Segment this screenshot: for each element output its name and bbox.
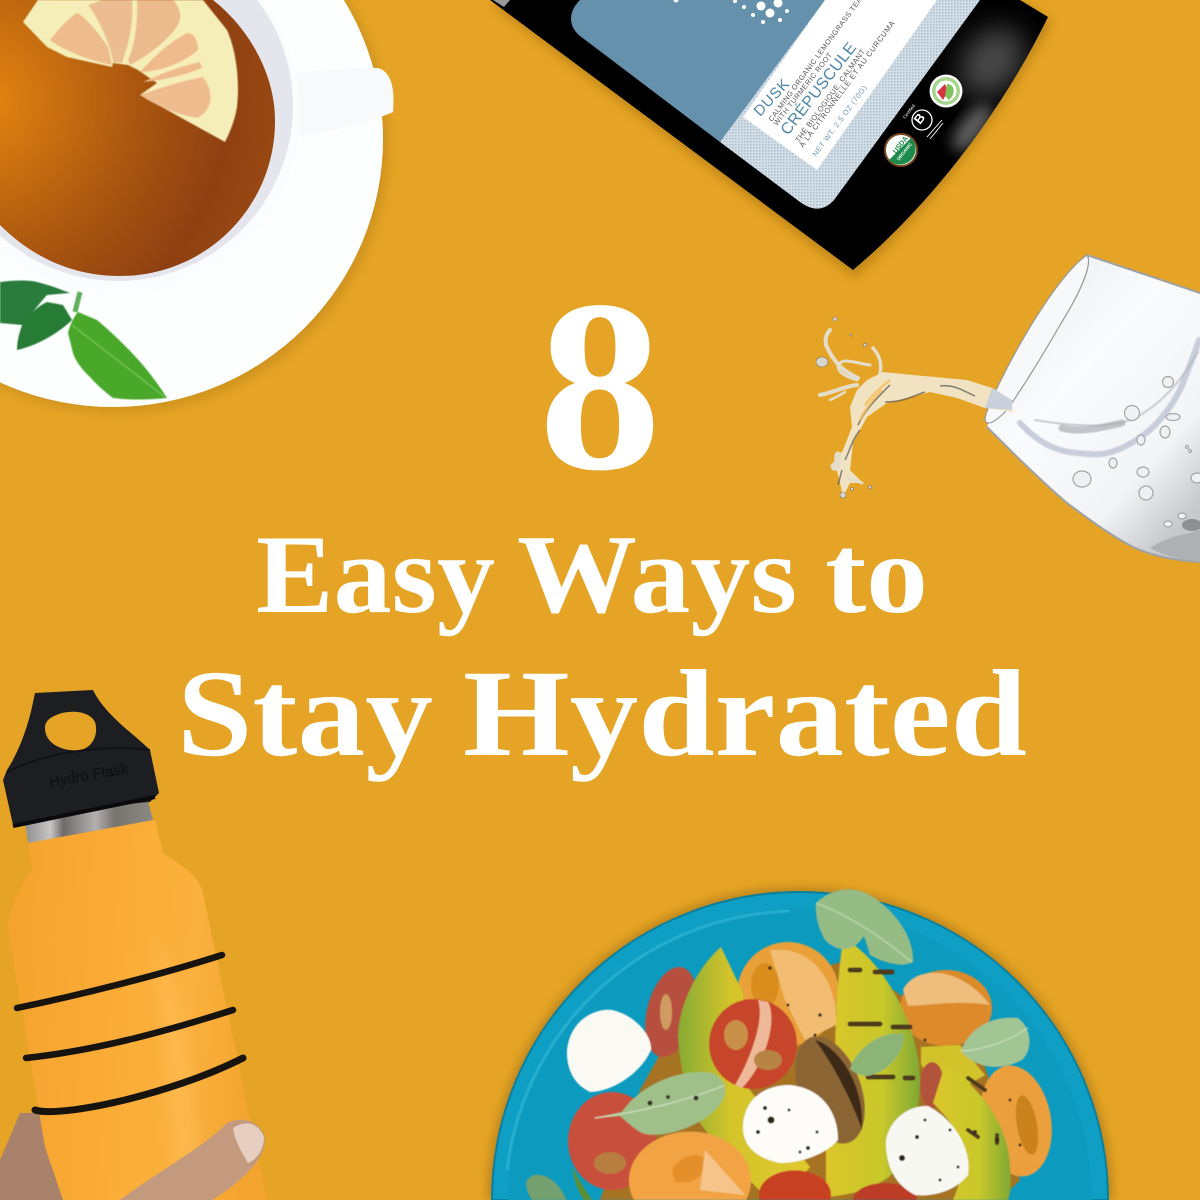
mint leaves [0, 280, 167, 400]
plate shadow [488, 888, 1112, 1200]
glass rim [985, 255, 1089, 423]
pouch dots [674, 0, 789, 24]
basil leaf right [961, 1018, 1029, 1067]
tea cup on saucer [0, 0, 394, 413]
title line two: Stay [177, 645, 433, 782]
USDA organic badge [885, 134, 917, 166]
Certified B badge: B [911, 110, 928, 127]
pouch white panel [743, 0, 937, 170]
glass base shadow [1150, 530, 1200, 562]
pouch body [490, 0, 1048, 270]
glass droplets [1073, 376, 1200, 527]
avocado behind right [921, 1045, 985, 1095]
plate [492, 892, 1108, 1200]
Certified B badge [902, 103, 943, 139]
cup handle [296, 68, 394, 136]
pouch label text: WITH TURMERIC ROOT [771, 50, 834, 127]
water swirl [1020, 340, 1199, 454]
water droplet dark [1182, 519, 1200, 531]
pouch shadow [490, 0, 1052, 278]
bottle cap: Hydro Flask [48, 760, 130, 791]
thumb [120, 1120, 265, 1200]
dark tomato [782, 1027, 878, 1153]
food gap base [600, 960, 1020, 1200]
basil leaf top [816, 889, 913, 965]
title line one: Easy [256, 513, 495, 637]
title line one: Ways [517, 513, 797, 637]
water stream bright streaks [860, 380, 890, 420]
basil leaf bottom left [526, 1175, 567, 1200]
water bottle in hand [0, 690, 267, 1200]
pouch label text: NET WT. 2.5 OZ (70G) [810, 84, 869, 158]
saucer [0, 0, 383, 407]
tomato red bottom left [568, 1092, 656, 1190]
pouch label text: CRÉPUSCULE [776, 39, 860, 138]
tomato red bottom right [853, 1183, 917, 1200]
pouch blue label [571, 0, 825, 142]
glass body [987, 255, 1200, 562]
title line two: Hydrated [463, 645, 1027, 782]
splash specks [816, 317, 872, 498]
pouch label text: À LA CITRONNELLE ET AU CURCUMA [797, 18, 897, 149]
basil leaf front [595, 1072, 725, 1135]
USDA organic badge: USDA [892, 135, 910, 155]
avocado right slice [933, 1065, 1011, 1200]
avocado green strip [572, 1167, 592, 1200]
tomato red left [637, 962, 705, 1062]
salad food [526, 889, 1060, 1200]
tomato red behind right [920, 1062, 944, 1108]
number eight: 8 [539, 250, 661, 521]
USDA organic badge: ORGANIC [896, 141, 913, 162]
salad plate [488, 888, 1112, 1200]
plate rim highlight [507, 911, 790, 1170]
stream water inside glass [985, 388, 1012, 410]
glass outline [987, 255, 1200, 562]
basil leaf centre [850, 1033, 904, 1076]
lemon slice [23, 0, 238, 142]
cup [0, 0, 300, 294]
pouch label text [750, 0, 897, 158]
tomato yellow top [737, 942, 839, 1046]
tomato orange bottom [629, 1132, 751, 1200]
pouch label text: THÉ BIOLOGIQUE, CALMANT [793, 47, 867, 144]
pouch top edge pattern [493, 0, 510, 7]
tea liquid [0, 0, 275, 276]
water splash [820, 330, 881, 483]
pouch label pattern [720, 0, 980, 209]
tomato red centre [709, 999, 797, 1089]
water stream [835, 372, 1014, 497]
water stream shadows [838, 385, 975, 485]
title line one: to [825, 513, 928, 637]
tomato red bottom [759, 1170, 831, 1200]
bottle steel neck [25, 797, 153, 843]
title line two [177, 645, 1027, 782]
saucer shadow [0, 0, 389, 413]
pepper specks [768, 966, 1022, 1146]
avocado left slice [678, 947, 810, 1195]
avocado centre slice [826, 938, 920, 1197]
Canada organic badge [930, 74, 962, 108]
mozzarella right [886, 1106, 969, 1195]
mozzarella left [567, 1010, 651, 1092]
water glass pouring [816, 255, 1200, 562]
hand palm [0, 1113, 70, 1200]
tomato orange far right [972, 1060, 1060, 1182]
bottle cap [3, 690, 159, 826]
tomato orange right [900, 970, 992, 1046]
pouch label text: DUSK [750, 76, 793, 120]
thumbnail [233, 1123, 264, 1163]
plate inner [508, 908, 1092, 1200]
pouch sheen [945, 15, 1038, 157]
title [177, 250, 1027, 782]
Certified B badge: Certified [902, 103, 916, 120]
hair ties [17, 955, 243, 1112]
bottle body [8, 820, 267, 1200]
title line one [256, 513, 928, 637]
bottle highlight [150, 920, 205, 1200]
tea pouch [490, 0, 1052, 278]
mozzarella centre [743, 1085, 838, 1163]
